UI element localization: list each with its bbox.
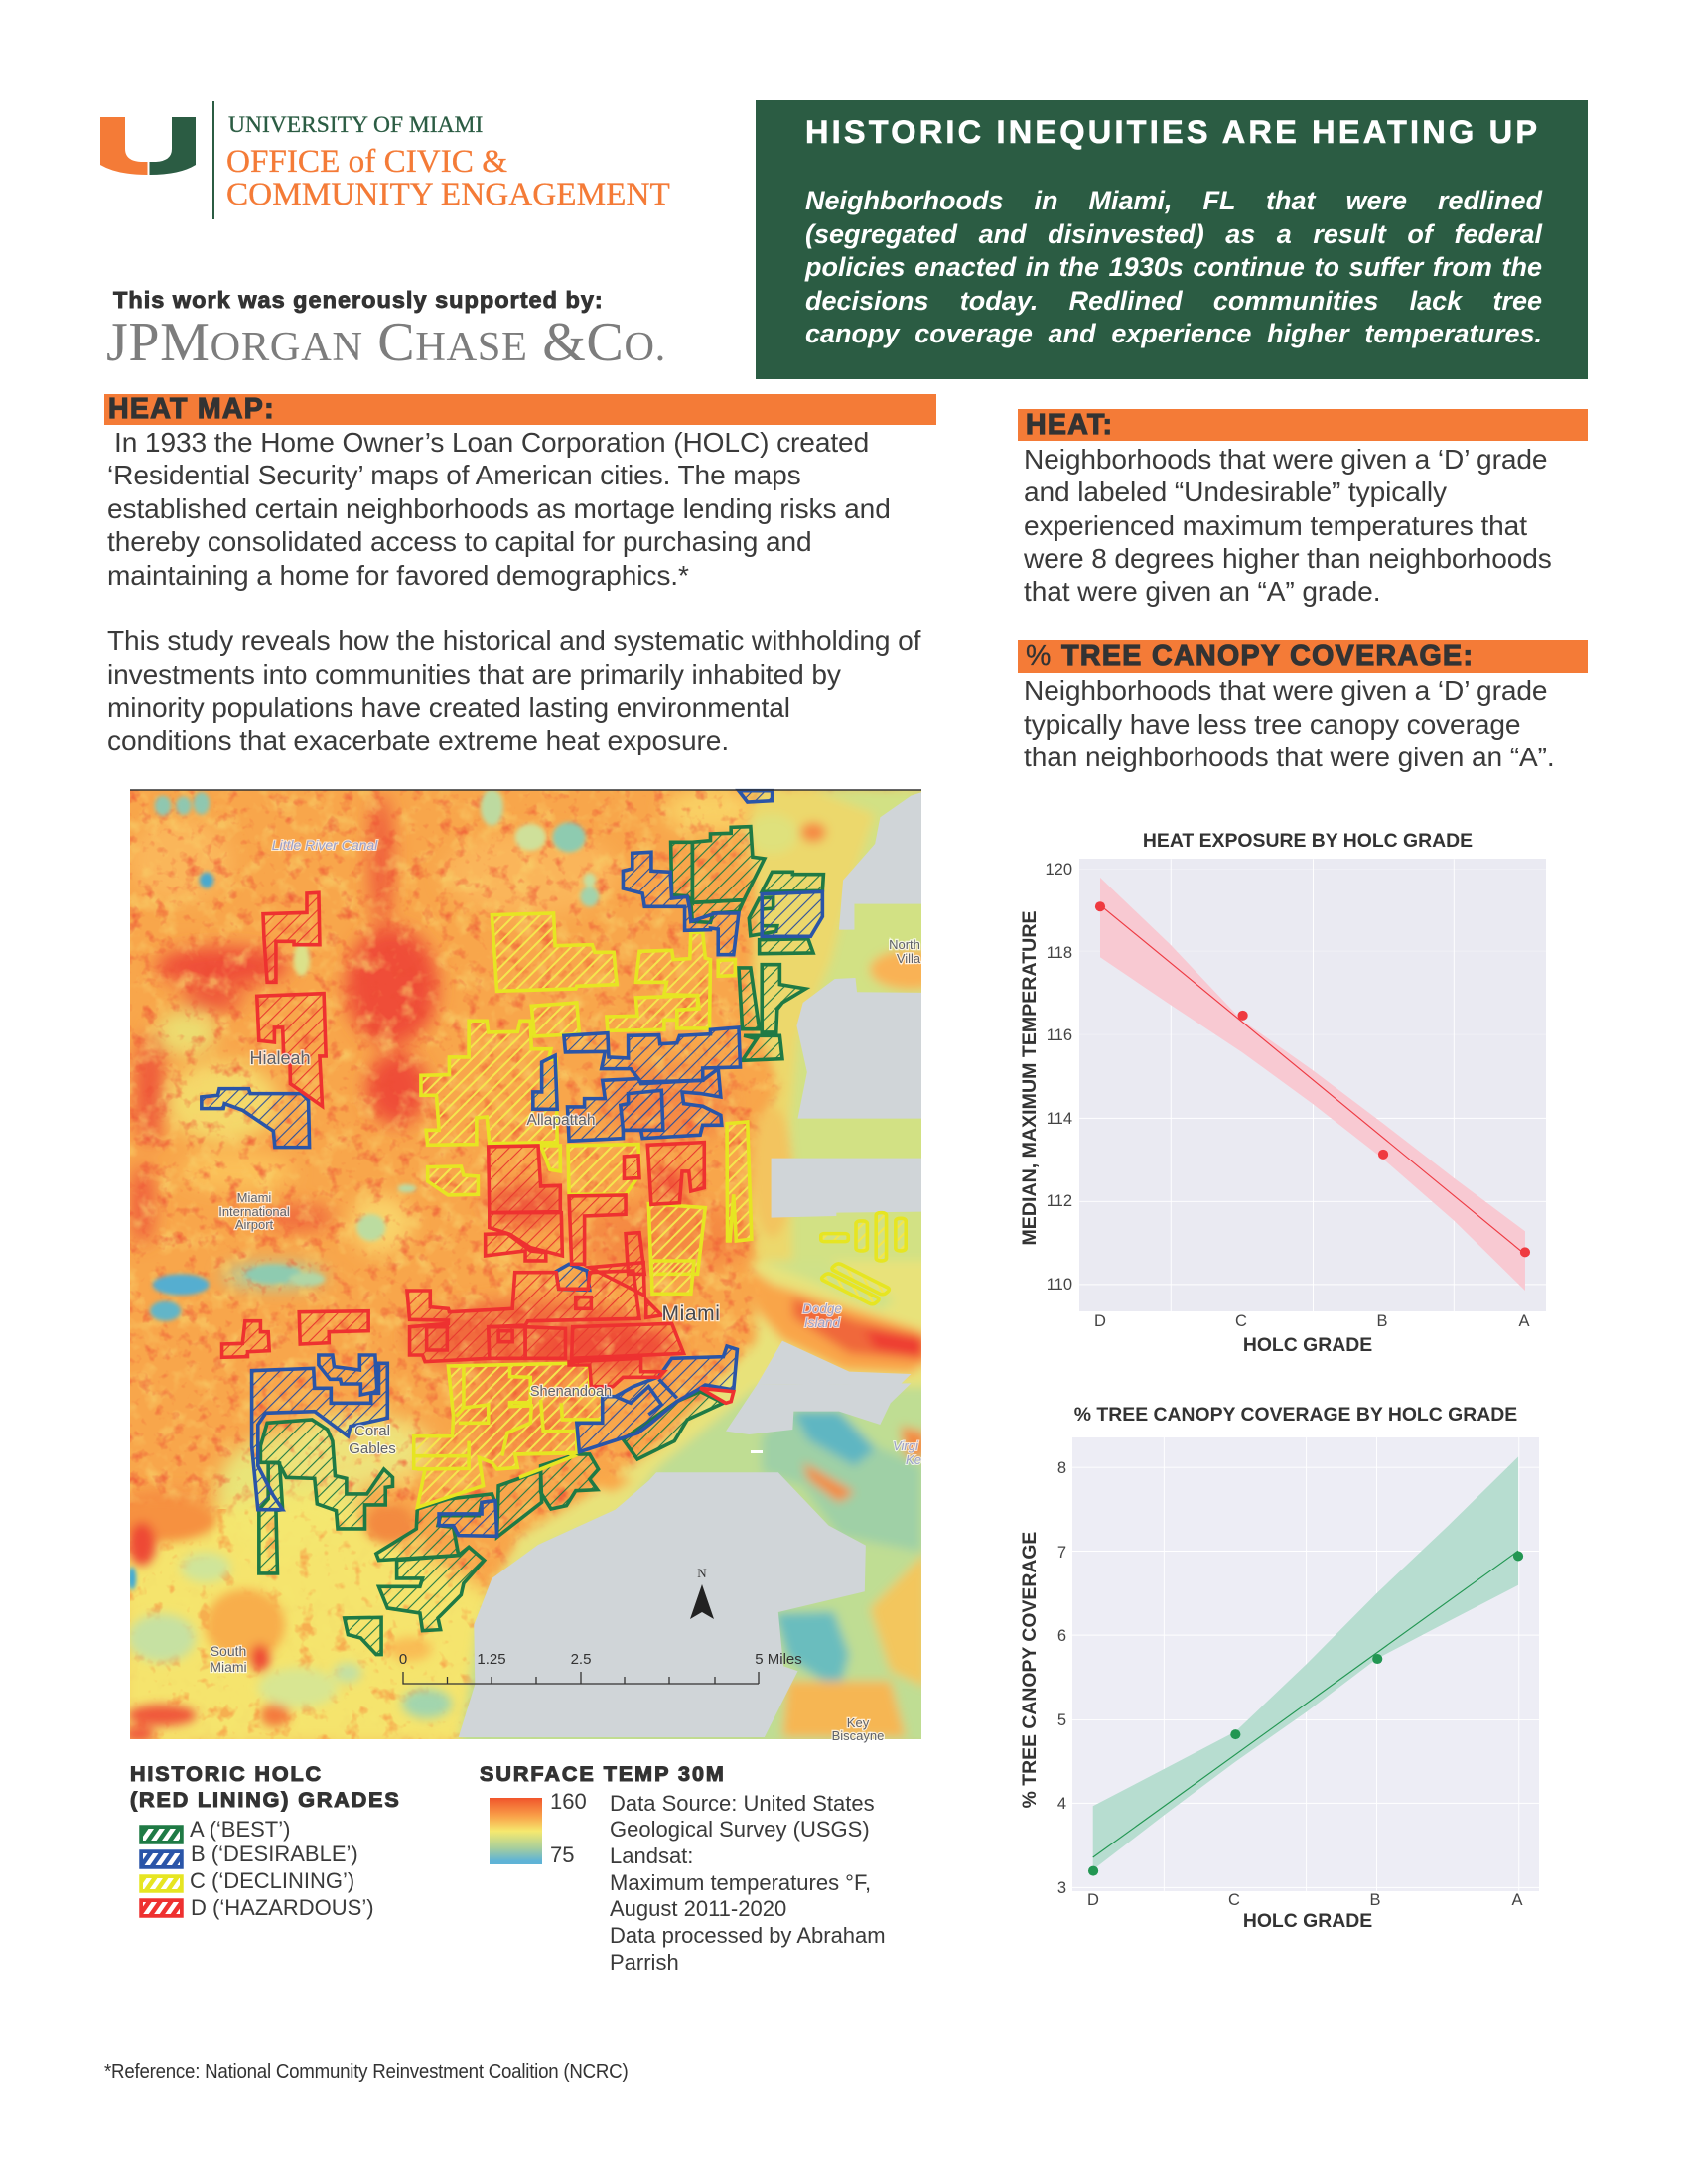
text block: HOLC history: thereby consolidated access to capital for purchasing and [107,526,812,557]
inland ponds [128,789,599,1590]
heading bar: tree canopy coverage: % TREE CANOPY COVERAGE: [1026,640,1474,672]
data source note: Maximum temperatures °F, [610,1870,871,1895]
y ticks: 116 [1047,1026,1072,1044]
text block: HOLC history: This study reveals how the historical and systematic withholding of [107,625,920,656]
grade B polygons [202,791,822,1536]
chart title: HEAT EXPOSURE BY HOLC GRADE [1143,830,1473,852]
y axis title: MEDIAN, MAXIMUM TEMPERATURE [1019,910,1041,1246]
map place labels: International [218,1204,290,1219]
y ticks [1045,861,1072,1294]
map place labels: Coral [354,1423,390,1439]
summary text: Neighborhoods in Miami, FL that were redlined [805,186,1542,215]
y axis title: % TREE CANOPY COVERAGE [1019,1532,1041,1808]
scale bar: 5 Miles [755,1651,802,1668]
map place labels: Virgi [893,1438,919,1453]
logo divider rule [212,101,214,219]
legend: HOLC grades [130,1144,720,1920]
y ticks: 8 [1057,1459,1066,1477]
panel: title and summary [756,100,1588,379]
x ticks: C [1235,1312,1247,1330]
text block: canopy finding: typically have less tree canopy coverage [1024,709,1520,740]
x ticks: A [1511,1891,1523,1909]
confidence band [1100,878,1525,1291]
data source note: Data processed by Abraham [610,1923,886,1948]
x ticks: D [1094,1312,1106,1330]
map place labels: Shenandoah [530,1384,612,1400]
text block: HOLC history: conditions that exacerbate extreme heat exposure. [107,725,729,755]
logo: University of Miami U mark [100,117,196,175]
data source note: Landsat: [610,1843,693,1868]
grid [1079,859,1546,1311]
text block: HOLC history: investments into communities that are primarily inhabited by [107,659,841,690]
map place labels: Gables [349,1440,396,1457]
grid [1072,1437,1539,1891]
summary text [804,186,1543,348]
y ticks: 5 [1057,1711,1066,1729]
y ticks [1057,1459,1066,1897]
grade A polygons [259,827,823,1655]
organisation name: COMMUNITY ENGAGEMENT [226,176,670,212]
legend heading: HISTORIC HOLC [130,1762,323,1786]
y ticks: 114 [1047,1110,1072,1128]
scale bar: 1.25 [477,1651,506,1668]
legend: surface temperature [480,1762,886,1975]
map base: land surface temperature [107,787,952,1747]
data points [1088,1551,1523,1876]
map place labels: Ke [906,1452,921,1467]
map place labels: Airport [235,1217,274,1232]
y ticks: 112 [1047,1192,1072,1210]
map place labels: Hialeah [249,1048,311,1068]
Biscayne Bay water [459,791,926,1737]
footnote: *Reference: National Community Reinvestment Coalition (NCRC) [104,2061,628,2083]
colour ramp [490,1798,542,1864]
y ticks: 6 [1057,1627,1066,1645]
text block: heat finding: experienced maximum temperatures that [1024,510,1527,541]
confidence band [1093,1456,1518,1870]
x ticks: B [1369,1891,1381,1909]
heat map of Miami with HOLC polygons [130,788,921,1743]
text block: canopy finding: than neighborhoods that were given an “A”. [1024,742,1555,772]
data source note: Parrish [610,1950,679,1975]
swatches [139,1825,184,1918]
text block: canopy finding [1024,675,1555,772]
text block: HOLC history [107,427,921,755]
summary text: decisions today. Redlined communities lack tree [805,286,1542,316]
trend line [1100,905,1525,1255]
summary text: policies enacted in the 1930s continue to suffer from the [805,252,1542,282]
x axis title: HOLC GRADE [1243,1334,1372,1356]
title: HISTORIC INEQUITIES ARE HEATING UP [805,114,1540,150]
text block: HOLC history: ‘Residential Security’ maps of American cities. The maps [107,460,801,490]
legend: HOLC grades: D (‘HAZARDOUS’) [191,1895,374,1920]
plot area [1079,859,1546,1311]
north arrow: N [697,1566,707,1580]
data source note: Data Source: United States [610,1791,875,1816]
map place labels: Biscayne [832,1728,884,1743]
text block: heat finding: and labeled “Undesirable” typically [1024,477,1447,507]
data source note [610,1791,886,1975]
southern suburbs: yellow with orange and green blobs [130,1484,558,1739]
y ticks: 3 [1057,1879,1066,1897]
chart title: % TREE CANOPY COVERAGE BY HOLC GRADE [1074,1404,1517,1426]
text block: heat finding: were 8 degrees higher than neighborhoods [1024,543,1552,574]
map place labels: North [889,937,920,952]
summary text: (segregated and disinvested) as a result of federal [805,219,1542,249]
heading bar: heat [1018,409,1588,441]
data points [1095,901,1530,1257]
scale bar [399,1651,802,1684]
x ticks: B [1376,1312,1388,1330]
data source note: Geological Survey (USGS) [610,1817,870,1842]
map place labels: Miami [210,1659,247,1675]
text block: HOLC history: maintaining a home for favored demographics.* [107,560,689,591]
heading bar: heat: HEAT: [1026,409,1113,441]
x ticks [1087,1891,1523,1909]
text block: heat finding: that were given an “A” grade. [1024,576,1380,607]
plot area [1072,1437,1539,1891]
y ticks: 4 [1057,1795,1066,1813]
legend labels: A (‘BEST’) [190,1817,290,1842]
legend: HOLC grades: C (‘DECLINING’) [190,1868,354,1893]
trend line [1093,1551,1518,1857]
y ticks: 118 [1047,944,1072,962]
map place labels: Allapattah [527,1112,595,1129]
legend: surface temperature: 75 [550,1843,574,1867]
texture noise [130,790,778,1578]
x axis title: HOLC GRADE [1243,1910,1372,1932]
y ticks: 110 [1047,1276,1072,1294]
map place labels: Miami [237,1190,271,1205]
map place labels: Villa [897,951,921,966]
y ticks: 7 [1057,1544,1066,1562]
legend heading [130,1762,401,1812]
scale bar: 0 [399,1651,407,1668]
text block: heat finding [1024,444,1552,607]
map place labels: Dodge [802,1301,842,1316]
grade D polygons [222,892,734,1403]
map place labels: Miami [661,1302,721,1325]
legend heading: SURFACE TEMP 30M [480,1762,726,1786]
support statement: This work was generously supported by: [113,287,604,313]
scale bar: 2.5 [571,1651,591,1668]
broad temperature zones [119,787,757,1552]
grade C polygons [414,913,906,1507]
map place labels [210,837,921,1743]
organisation name: OFFICE of CIVIC & [226,143,507,180]
text block: HOLC history: established certain neighborhoods as mortage lending risks and [107,493,891,524]
text block: heat finding: Neighborhoods that were given a ‘D’ grade [1024,444,1547,475]
map place labels: South [211,1643,246,1659]
causeway marker [751,1450,763,1453]
heading bar: heat map: HEAT MAP: [108,393,275,425]
map place labels: Key [847,1715,870,1730]
legend: HOLC grades: B (‘DESIRABLE’) [191,1842,358,1866]
coastal bands and bay islands [459,787,952,1747]
organisation name: UNIVERSITY OF MIAMI [228,112,483,138]
text block: canopy finding: Neighborhoods that were given a ‘D’ grade [1024,675,1547,706]
x ticks: A [1518,1312,1530,1330]
text block: HOLC history: minority populations have created lasting environmental [107,692,790,723]
data source note: August 2011-2020 [610,1896,786,1921]
x ticks: C [1228,1891,1240,1909]
heading bar: heat map [104,394,936,425]
y ticks: 120 [1045,861,1072,879]
x ticks: D [1087,1891,1099,1909]
legend heading: (RED LINING) GRADES [130,1787,401,1811]
organisation name [226,112,670,212]
map place labels: Little River Canal [272,837,378,853]
ramp labels: 160 [550,1789,587,1814]
text block: HOLC history: In 1933 the Home Owner’s Loan Corporation (HOLC) created [114,427,869,458]
sponsor wordmark: JPMORGAN CHASE &CO. [106,312,666,373]
x ticks [1094,1312,1530,1330]
north arrow [690,1566,714,1619]
summary text: canopy coverage and experience higher temperatures. [805,319,1542,348]
map place labels: Island [804,1315,841,1330]
